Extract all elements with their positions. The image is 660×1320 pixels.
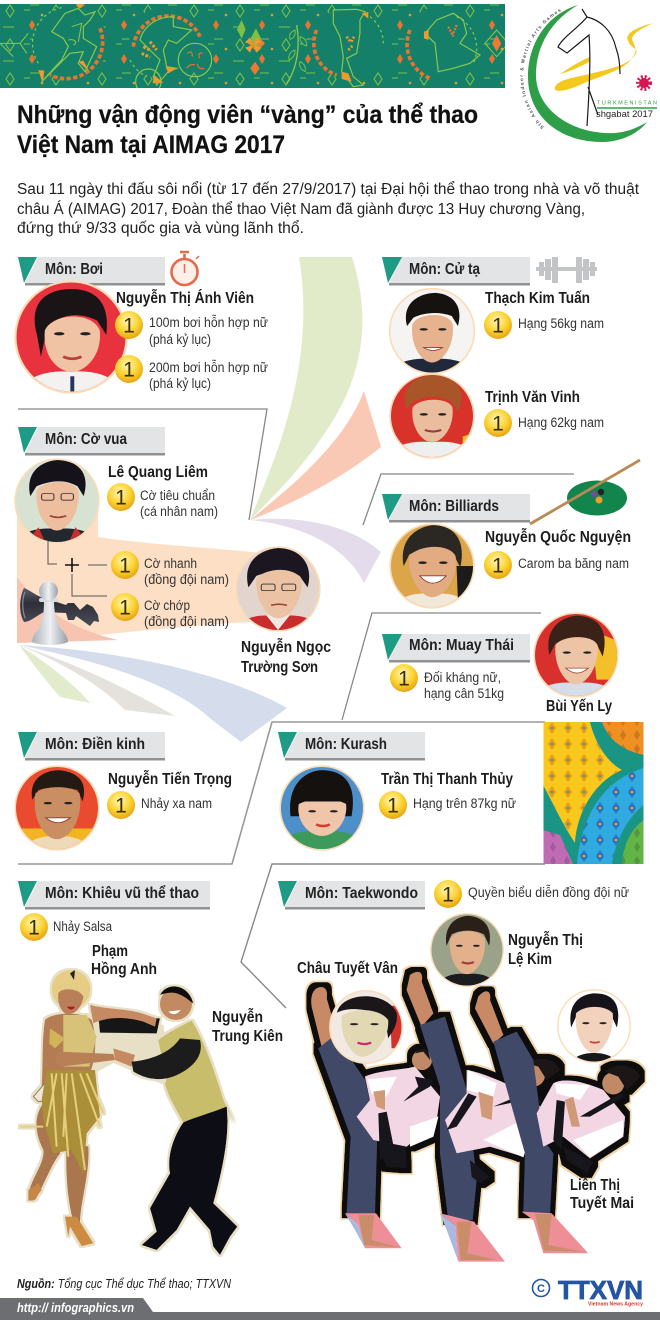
medal event: (cá nhân nam) <box>140 504 218 519</box>
photo: Nguyễn Thị Ánh Viên <box>14 280 128 394</box>
medal event: (đồng đội nam) <box>144 572 229 587</box>
athlete name: Trung Kiên <box>212 1028 283 1045</box>
photo: Nguyễn Quốc Nguyện <box>389 523 475 609</box>
footer bar <box>0 1298 660 1320</box>
photo: Trần Thị Thanh Thủy <box>279 765 365 851</box>
panel: dance sport <box>18 881 283 1255</box>
medal: 1 <box>123 358 135 382</box>
icon: barbell <box>536 257 597 283</box>
medal event <box>140 488 218 519</box>
athlete name: Hồng Anh <box>91 961 157 978</box>
athlete name: Nguyễn Thị Ánh Viên <box>116 290 254 307</box>
section label: Billiards: Môn: Billiards <box>409 498 499 515</box>
medal <box>484 409 512 437</box>
logo: Ashgabat 2017 <box>520 5 657 142</box>
medal: 1 <box>119 554 131 578</box>
title <box>17 101 478 159</box>
section label: Muay Thái: Môn: Muay Thái <box>409 637 514 654</box>
photo: Lê Quang Liêm <box>14 458 100 544</box>
icon: chess pawn and king <box>20 582 99 645</box>
medal event: (phá kỷ lục) <box>149 376 211 391</box>
medal event <box>424 670 504 701</box>
section label: Billiards <box>382 494 530 522</box>
lower petals <box>19 645 287 742</box>
medal: 1 <box>492 412 504 436</box>
athlete name: Trần Thị Thanh Thủy <box>381 771 513 788</box>
medal event: (đồng đội nam) <box>144 614 229 629</box>
TTXVN logo: TTXVN <box>558 1275 643 1305</box>
athlete name: Trịnh Văn Vinh <box>485 389 580 406</box>
athlete name: Nguyễn Thị <box>508 932 583 949</box>
icon: stopwatch <box>172 252 199 285</box>
section label: Cử tạ <box>382 257 530 286</box>
panel: chess <box>1 427 332 676</box>
medal event <box>144 556 229 587</box>
medal event: Carom ba băng nam <box>518 556 629 571</box>
logo: Ashgabat 2017: shgabat 2017 <box>596 109 653 120</box>
medal <box>111 593 139 621</box>
chess panel background <box>17 490 280 643</box>
athlete name <box>241 639 331 676</box>
title: Việt Nam tại AIMAG 2017 <box>17 131 285 159</box>
photo: Thạch Kim Tuấn <box>388 288 476 374</box>
logo: Ashgabat 2017: 5th Asian Indoor & Martial Arts Games <box>520 9 561 129</box>
banner: sport pattern <box>0 4 505 88</box>
team connector <box>48 541 107 596</box>
medal event: Cờ chớp <box>144 598 190 613</box>
section label: Muay Thái <box>382 634 530 662</box>
medal event: Hạng 56kg nam <box>518 316 604 331</box>
medal: 1 <box>442 884 454 906</box>
footer bar: http:// infographics.vn <box>17 1300 134 1315</box>
photo: Nguyễn Tiến Trọng <box>14 765 100 851</box>
section label: Khiêu vũ thể thao: Môn: Khiêu vũ thể thao <box>45 885 199 902</box>
athlete name: Nguyễn Tiến Trọng <box>108 771 232 788</box>
panel: weightlifting <box>375 257 604 461</box>
medal: 1 <box>492 554 504 578</box>
athlete name <box>212 1009 283 1045</box>
athlete name: Trường Sơn <box>241 659 318 676</box>
medal event: Hạng trên 87kg nữ <box>413 796 516 811</box>
section label: Cờ vua: Môn: Cờ vua <box>45 431 127 448</box>
section label: Điền kinh: Môn: Điền kinh <box>45 736 145 753</box>
medal event: Nhảy Salsa <box>53 919 112 934</box>
medal <box>484 311 512 339</box>
medal <box>111 551 139 579</box>
section label: Bơi: Môn: Bơi <box>45 261 103 278</box>
photo: Châu Tuyết Vân <box>329 990 403 1064</box>
athlete name <box>508 932 583 968</box>
medal event: Hạng 62kg nam <box>518 415 604 430</box>
medal event: hạng cân 51kg <box>424 686 504 701</box>
centre petals <box>250 257 381 583</box>
athlete name: Châu Tuyết Vân <box>297 960 398 977</box>
athlete name: Liên Thị <box>570 1177 620 1194</box>
medal <box>107 791 135 819</box>
medal <box>20 913 48 941</box>
photo: Bùi Yến Ly <box>533 612 619 698</box>
athlete name: Phạm <box>92 943 128 960</box>
medal event: Nhảy xa nam <box>141 796 212 811</box>
medal event: Quyền biểu diễn đồng đội nữ <box>468 885 629 900</box>
intro text <box>17 181 640 237</box>
logo: Ashgabat 2017: TURKMENISTAN <box>597 100 657 106</box>
source note: Nguồn: Tổng cục Thể dục Thể thao; TTXVN <box>17 1276 232 1291</box>
medal <box>484 551 512 579</box>
medal event: Cờ nhanh <box>144 556 197 571</box>
athlete name: Lê Quang Liêm <box>108 464 208 481</box>
section label: Cờ vua <box>18 427 165 456</box>
medal event: 200m bơi hỗn hợp nữ <box>149 360 268 375</box>
section label: Taekwondo: Môn: Taekwondo <box>305 885 418 902</box>
icon: billiard table and cue <box>530 460 640 524</box>
medal: 1 <box>28 916 40 940</box>
medal event: Cờ tiêu chuẩn <box>140 488 215 503</box>
athlete name: Lệ Kim <box>508 951 552 968</box>
medal: 1 <box>398 668 410 690</box>
athlete name <box>91 943 157 978</box>
medal: 1 <box>492 314 504 338</box>
medal <box>434 880 462 908</box>
section label: Cử tạ: Môn: Cử tạ <box>409 261 480 278</box>
medal <box>115 355 143 383</box>
medal event: (phá kỷ lục) <box>149 332 211 347</box>
photo: Nguyễn Ngọc Trường Sơn <box>236 546 321 632</box>
athlete name: Nguyễn Ngọc <box>241 639 331 656</box>
athlete name: Nguyễn <box>212 1009 263 1026</box>
athlete name: Nguyễn Quốc Nguyện <box>485 529 631 546</box>
athlete name <box>570 1177 634 1212</box>
medal event <box>149 315 268 347</box>
medal event: Đối kháng nữ, <box>424 670 501 685</box>
medal: 1 <box>123 314 135 338</box>
panel: Muay Thai <box>382 610 632 715</box>
section label: Bơi <box>18 257 165 286</box>
medal <box>115 311 143 339</box>
medal: 1 <box>115 794 127 818</box>
medal: 1 <box>119 596 131 620</box>
panel: billiards <box>380 460 640 611</box>
panel: taekwondo <box>278 880 640 1262</box>
medal <box>390 664 418 692</box>
athlete name: Thạch Kim Tuấn <box>485 290 590 307</box>
panel: Kurash <box>268 722 644 864</box>
medal <box>379 791 407 819</box>
intro text: châu Á (AIMAG) 2017, Đoàn thể thao Việt Nam đã giành được 13 Huy chương Vàng, <box>17 201 585 218</box>
medal <box>107 483 135 511</box>
medal: 1 <box>387 794 399 818</box>
decorative pattern panel <box>543 722 644 864</box>
medal event <box>144 598 229 629</box>
medal event: 100m bơi hỗn hợp nữ <box>149 315 268 330</box>
intro text: đứng thứ 9/33 quốc gia và vùng lãnh thổ. <box>17 220 304 237</box>
panel: athletics <box>1 732 232 853</box>
section label: Khiêu vũ thể thao <box>18 881 210 910</box>
panel: swimming <box>0 252 268 397</box>
TTXVN logo: Vietnam News Agency <box>588 1302 644 1308</box>
title: Những vận động viên “vàng” của thể thao <box>17 101 478 129</box>
intro text: Sau 11 ngày thi đấu sôi nổi (từ 17 đến 27/9/2017) tại Đại hội thể thao trong nhà và võ thuật <box>17 181 640 198</box>
athlete name: Bùi Yến Ly <box>546 698 612 715</box>
dancers <box>20 970 237 1255</box>
photo: Liên Thị Tuyết Mai <box>557 989 631 1063</box>
medal: 1 <box>115 486 127 510</box>
TTXVN logo: C <box>537 1283 545 1295</box>
athlete name: Tuyết Mai <box>570 1195 634 1212</box>
section label: Kurash <box>278 732 425 760</box>
photo: Trịnh Văn Vinh <box>389 374 475 459</box>
section label: Taekwondo <box>278 881 425 910</box>
photo: Nguyễn Thị Lệ Kim <box>430 913 504 987</box>
performers <box>311 972 640 1262</box>
section label: Điền kinh <box>18 732 165 760</box>
section label: Kurash: Môn: Kurash <box>305 736 387 753</box>
medal event <box>149 360 268 391</box>
